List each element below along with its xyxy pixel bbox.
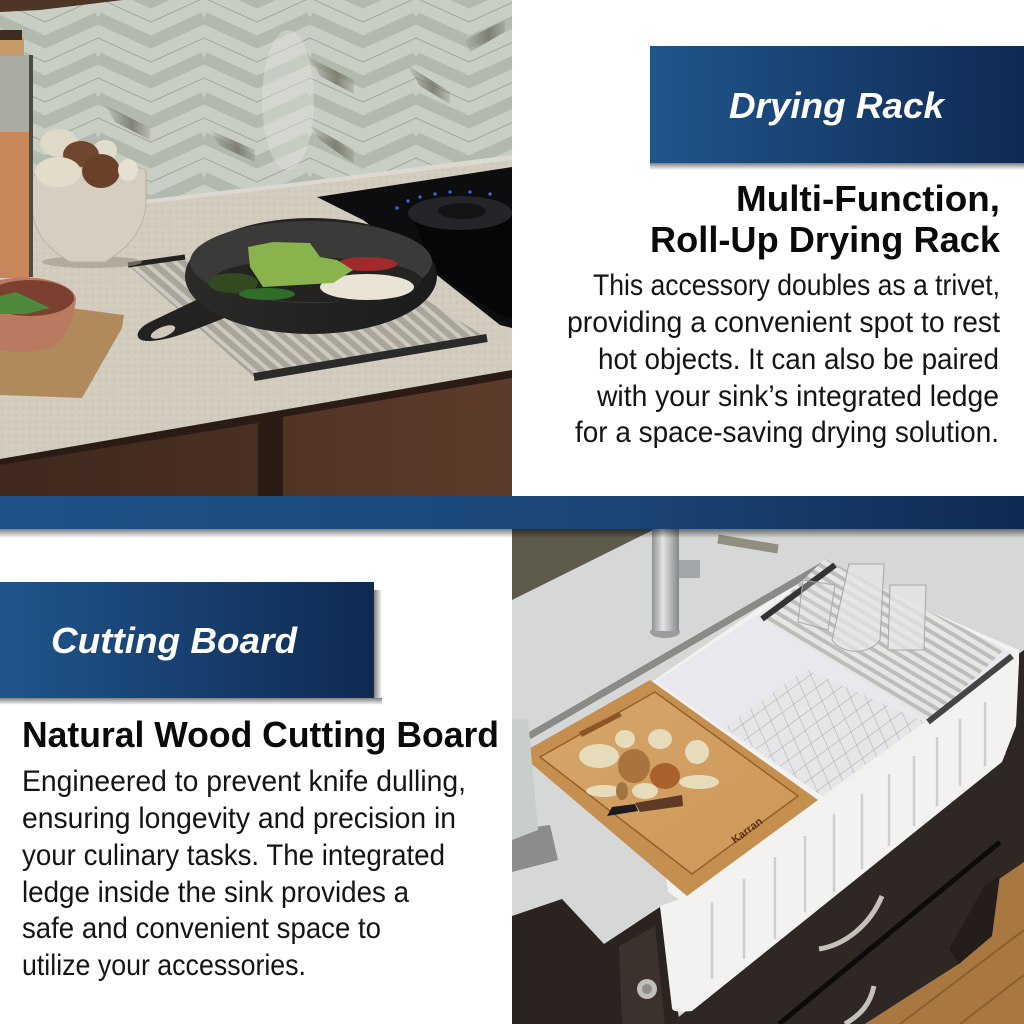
banner: Drying Rack <box>650 46 1024 170</box>
cutting board <box>520 680 818 896</box>
text block: drying rack description: for a space-saving drying solution. <box>575 416 999 449</box>
roll-up rack <box>762 559 1012 722</box>
board logo: Karran <box>730 815 765 846</box>
wood floor <box>865 862 1024 1024</box>
heading: Multi-Function, Roll-Up Drying Rack: Roll-Up Drying Rack <box>650 219 1001 260</box>
brick backsplash <box>512 529 655 600</box>
knife <box>607 795 683 816</box>
drawer gap <box>779 842 1000 1024</box>
cooktop <box>317 167 512 328</box>
drying rack <box>128 257 487 377</box>
cabinet leg <box>949 875 1000 964</box>
wooden board <box>0 308 124 398</box>
sink rim <box>640 564 1019 900</box>
text block: cutting board description: ensuring longevity and precision in <box>22 802 456 835</box>
basin grid <box>725 669 925 796</box>
heading: Multi-Function, Roll-Up Drying Rack <box>650 178 1001 260</box>
wood shelf at top <box>0 0 123 12</box>
text block: cutting board description: Engineered to prevent knife dulling, <box>22 765 466 798</box>
mushrooms <box>579 729 719 800</box>
photo: farmhouse sink with accessories <box>512 529 1024 1024</box>
banner: Cutting Board <box>0 582 382 705</box>
counter rim highlight <box>143 155 512 204</box>
text block: cutting board description <box>22 765 466 982</box>
glass jar <box>0 30 33 278</box>
food in skillet <box>208 242 414 300</box>
glasses <box>798 564 926 651</box>
text block: drying rack description: providing a convenient spot to rest <box>567 306 1001 339</box>
photo: skillet on drying rack in kitchen <box>0 0 512 496</box>
text block: drying rack description: hot objects. It can also be paired <box>598 343 999 376</box>
text block: cutting board description: ledge inside the sink provides a <box>22 876 409 909</box>
text block: drying rack description: with your sink’s integrated ledge <box>596 380 999 413</box>
text block: cutting board description: your culinary tasks. The integrated <box>22 839 445 872</box>
left cabinet <box>512 899 680 1024</box>
heading: Natural Wood Cutting Board: Natural Wood Cutting Board <box>22 714 499 755</box>
skillet <box>138 218 437 342</box>
heading: Multi-Function, Roll-Up Drying Rack: Multi-Function, <box>736 178 1000 219</box>
text block: cutting board description: utilize your accessories. <box>22 949 306 982</box>
text block: drying rack description <box>567 269 1001 449</box>
sink apron with flutes <box>660 661 1019 1012</box>
tile wall <box>0 0 512 200</box>
banner: Drying Rack: Drying Rack <box>729 85 946 126</box>
faucet <box>650 529 778 638</box>
countertop <box>0 157 512 459</box>
bowl of eggs <box>32 129 146 268</box>
cabinets <box>0 370 512 496</box>
glass and napkin on counter <box>512 719 558 872</box>
cabinet under sink <box>678 754 1006 1024</box>
text block: cutting board description: safe and convenient space to <box>22 912 381 945</box>
stainless rim edge <box>529 566 822 736</box>
right-side cabinet <box>999 650 1024 879</box>
sink basin <box>658 597 1012 782</box>
drawer handles <box>819 896 882 1024</box>
banner: Cutting Board: Cutting Board <box>51 620 298 661</box>
copper bowl <box>0 278 76 352</box>
section divider band <box>0 496 1024 538</box>
left cabinet door and knob <box>619 926 665 1024</box>
